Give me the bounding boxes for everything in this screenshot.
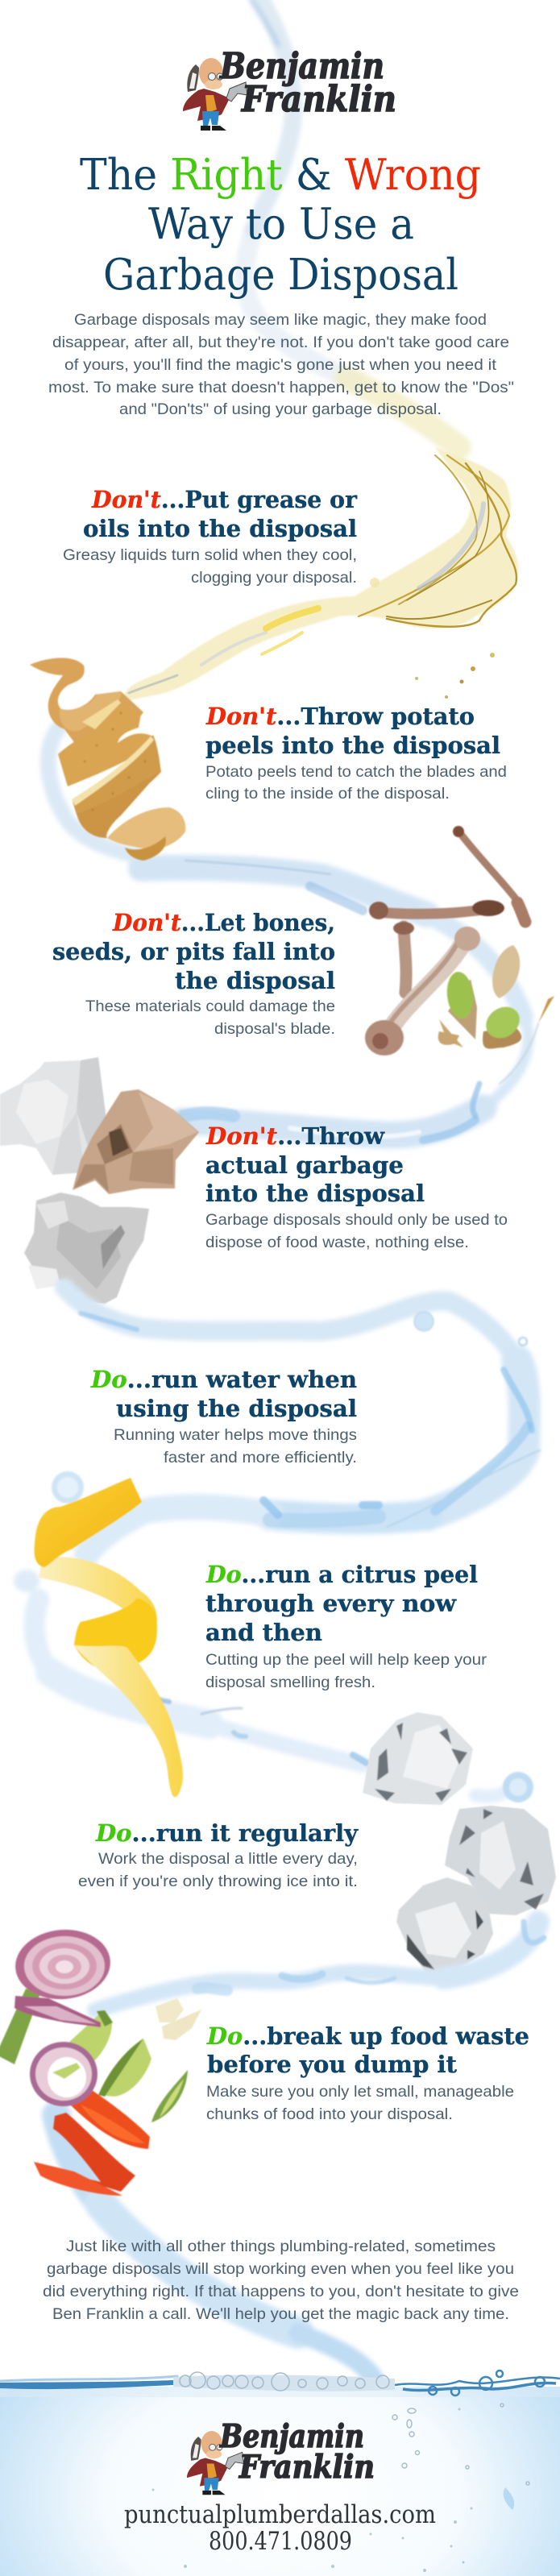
tip: run it regularly [78, 1819, 359, 1890]
water detail: ice trail [145, 1696, 533, 1802]
closing paragraph: did everything right. If that happens to you, don't hesitate to give [43, 2283, 519, 2300]
closing paragraph: garbage disposals will stop working even when you feel like you [47, 2260, 514, 2278]
rising bubbles [392, 2404, 529, 2485]
vegetables [0, 1926, 201, 2196]
tip: break up food waste: Make sure you only let small, manageable [206, 2083, 514, 2101]
water detail: highlights [184, 861, 538, 1140]
tip: run water: faster and more efficiently. [164, 1449, 357, 1466]
cucumber sliver [151, 2070, 188, 2122]
tip: run water: Do...run water when [90, 1366, 357, 1393]
water detail: running water highlights [52, 1312, 540, 1527]
garlic [156, 1998, 184, 2022]
red pepper [34, 2113, 135, 2192]
water stream: around lemon to ice [14, 1570, 508, 1797]
tip: potato peels: cling to the inside of the disposal. [205, 785, 450, 803]
tip: potato peels [205, 703, 507, 803]
water detail: lower stream highlight [197, 1922, 544, 1990]
potato peel [30, 657, 185, 861]
closing paragraph: Ben Franklin a call. We'll help you get the magic back any time. [52, 2305, 509, 2323]
tip: bones, seeds, pits: Don't...Let bones, [112, 909, 335, 936]
icon: Ben Franklin mascot [187, 2431, 243, 2495]
tip: break up food waste: Do...break up food waste [206, 2022, 529, 2050]
tip: break up food waste: chunks of food into your disposal. [206, 2105, 453, 2123]
intro paragraph: disappear, after all, but they're not. If you don't take good care [52, 334, 509, 351]
tip: bones, seeds, pits: the disposal [175, 967, 335, 994]
title: Garbage Disposal [103, 251, 458, 300]
tip: grease or oils: clogging your disposal. [191, 569, 357, 587]
website and phone: punctualplumberdallas.com [124, 2500, 436, 2529]
water line: right [395, 2371, 560, 2396]
tip: run it regularly: Work the disposal a little every day, [98, 1850, 358, 1868]
closing paragraph: Just like with all other things plumbing-related, sometimes [66, 2238, 496, 2255]
water stream: under garbage to right curve [64, 1288, 525, 1553]
tip: grease or oils: oils into the disposal [83, 515, 357, 542]
tip: actual garbage: dispose of food waste, nothing else. [205, 1234, 469, 1251]
water pool [0, 2371, 560, 2576]
ice cube right [445, 1806, 556, 1915]
title: Way to Use a [148, 200, 414, 249]
oil splash [124, 447, 518, 701]
lemon peel [35, 1478, 183, 1797]
tip: break up food waste [206, 2022, 529, 2123]
icon: Ben Franklin mascot [183, 58, 247, 131]
intro paragraph: and "Don'ts" of using your garbage disposal. [119, 400, 442, 418]
tip: bones, seeds, pits: seeds, or pits fall into [52, 938, 335, 965]
tip: run water: using the disposal [116, 1395, 357, 1422]
tip: actual garbage [205, 1122, 508, 1251]
wordmark: Benjamin [219, 2418, 364, 2455]
tip: actual garbage: Garbage disposals should only be used to [205, 1211, 508, 1229]
water line: bubble band [173, 2375, 395, 2391]
ice cube lower [396, 1877, 493, 1974]
tip: grease or oils: Greasy liquids turn solid when they cool, [63, 546, 357, 564]
tip: run it regularly: even if you're only throwing ice into it. [78, 1873, 358, 1890]
intro paragraph: of yours, you'll find the magic's gone just when you need it [64, 356, 497, 374]
tip: potato peels: Potato peels tend to catch the blades and [205, 763, 507, 781]
crumpled white paper [0, 1057, 109, 1175]
ice cube top [363, 1712, 473, 1805]
tip: bones, seeds, pits: disposal's blade. [214, 1020, 335, 1038]
tip: potato peels: Don't...Throw potato [205, 703, 475, 730]
water line: left [0, 2380, 173, 2389]
intro paragraph: most. To make sure that doesn't happen, get to know the "Dos" [48, 379, 514, 396]
cucumber strip [0, 1989, 40, 2064]
tip: citrus peel: and then [205, 1619, 322, 1646]
wordmark: Benjamin [218, 46, 384, 87]
red onion slice [12, 1926, 114, 2003]
tip: citrus peel [205, 1561, 487, 1691]
cucumber slice right [98, 2039, 151, 2097]
bones and pistachios [365, 826, 554, 1056]
cucumber chunk [66, 2013, 112, 2071]
tip: run it regularly: Do...run it regularly [95, 1819, 359, 1847]
onion wedge [15, 1996, 101, 2027]
closing paragraph [43, 2238, 519, 2323]
tip: run water [90, 1366, 357, 1466]
website and phone: 800.471.0809 [209, 2527, 352, 2556]
water line: bubbles [180, 2372, 389, 2391]
tip: potato peels: peels into the disposal [205, 732, 500, 759]
onion ring [30, 2042, 97, 2106]
tip: break up food waste: before you dump it [207, 2051, 458, 2078]
water stream: around potato to bones and paper [48, 729, 529, 1135]
water stream: falling into pool [56, 2115, 379, 2387]
tip: actual garbage: Don't...Throw [205, 1122, 385, 1150]
top logo: Benjamin Franklin: Franklin [240, 79, 396, 120]
intro paragraph [48, 311, 514, 418]
title [80, 151, 481, 300]
intro paragraph: Garbage disposals may seem like magic, they make food [74, 311, 487, 329]
top logo: Benjamin Franklin [183, 46, 396, 131]
tip: grease or oils [63, 486, 358, 587]
tip: actual garbage: actual garbage [205, 1151, 404, 1179]
crumpled grey foil [24, 1193, 149, 1304]
bottom logo: Benjamin Franklin [187, 2418, 375, 2495]
tip: citrus peel: Do...run a citrus peel [205, 1561, 478, 1588]
tip: citrus peel: through every now [205, 1590, 457, 1617]
title: The Right & Wrong [80, 151, 481, 200]
tip: bones, seeds, pits [52, 909, 335, 1038]
bottom logo: Benjamin Franklin: Franklin [239, 2449, 375, 2486]
water stream: ice to vegetables [95, 1922, 538, 2010]
tip: run water: Running water helps move things [114, 1426, 357, 1444]
tip: grease or oils: Don't...Put grease or [91, 486, 358, 513]
website and phone [124, 2500, 436, 2556]
tip: citrus peel: Cutting up the peel will help keep your [205, 1651, 487, 1669]
crumpled brown paper [73, 1089, 199, 1194]
water stream: faint top pour [245, 0, 459, 447]
carrot round [68, 2087, 150, 2149]
tip: actual garbage: into the disposal [205, 1180, 425, 1207]
tip: bones, seeds, pits: These materials could damage the [85, 998, 335, 1015]
tip: citrus peel: disposal smelling fresh. [205, 1674, 375, 1691]
